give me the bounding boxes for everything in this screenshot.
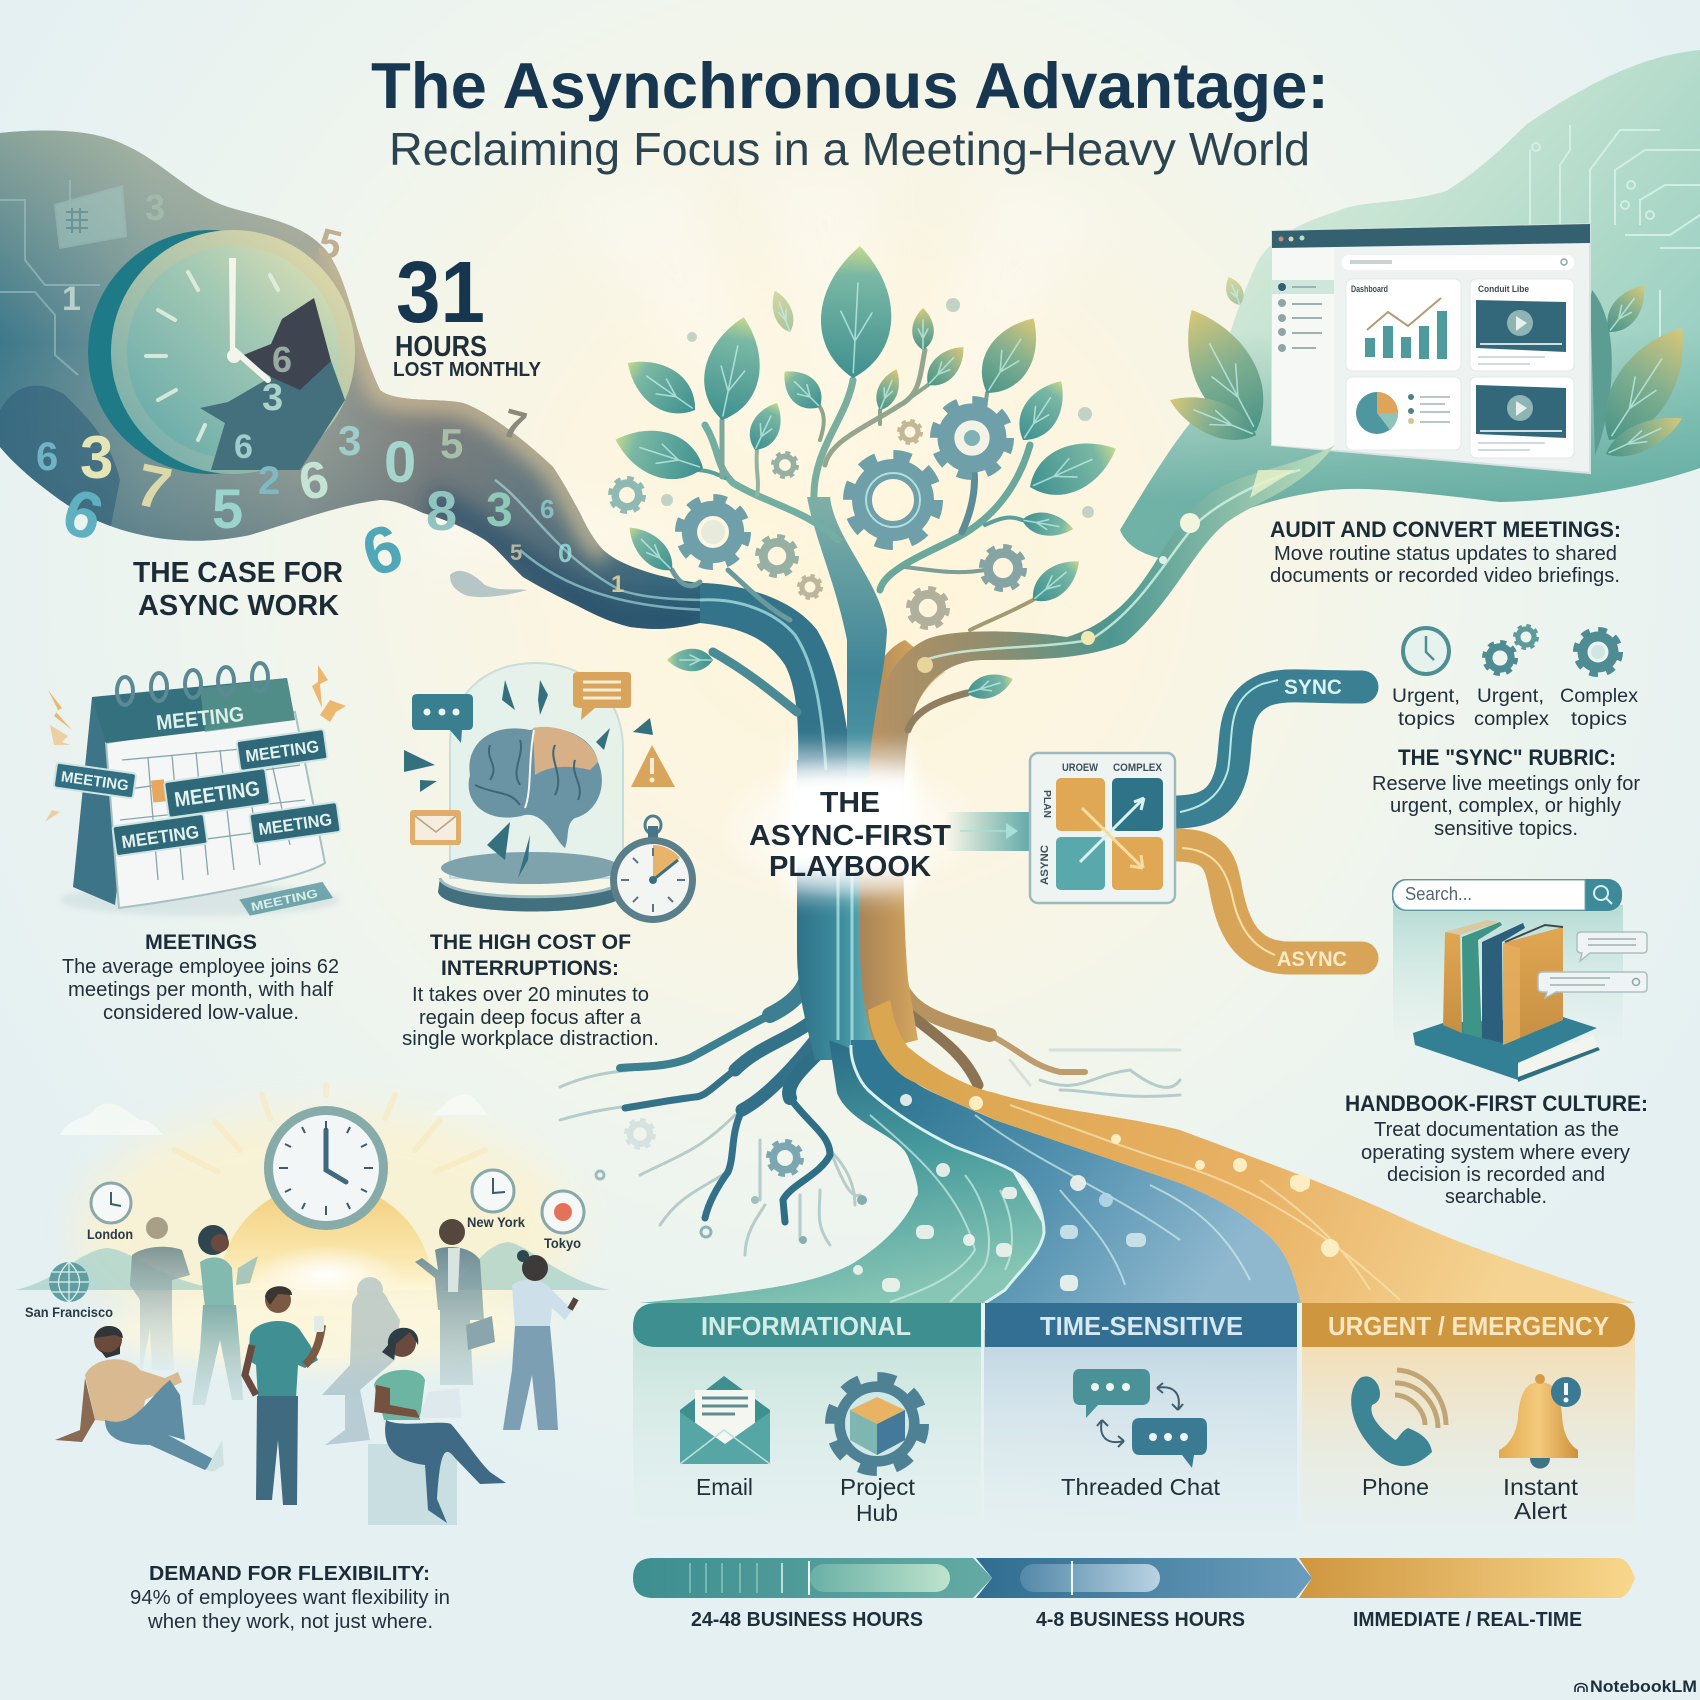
streams [639,1000,1635,1303]
column backgrounds [633,1330,1635,1560]
tree leaves [609,244,1125,704]
heading: the async-first playbook: ASYNC-FIRST [749,820,951,852]
small clocks and city labels: Tokyo [544,1236,581,1251]
timeline labels: IMMEDIATE / REAL-TIME [1353,1609,1582,1631]
text: meetings [62,931,339,1024]
person: ghost sitting [322,1277,400,1445]
sync path: SYNC [1284,676,1342,699]
labels: urgent and complex: complex [1474,708,1549,730]
small clocks and city labels: New York [467,1215,525,1230]
timeline labels: 4-8 BUSINESS HOURS [1036,1609,1245,1631]
person: woman with laptop on block [368,1328,506,1525]
text: the sync rubric [1372,745,1640,840]
header: time-sensitive: TIME-SENSITIVE [1040,1311,1243,1341]
panel: the case for async work [0,131,720,629]
meeting tags: MEETING [60,768,130,795]
tool labels: Email [696,1474,753,1500]
plants around dashboard [1163,274,1700,466]
falling numbers: 2 [258,459,280,503]
falling numbers: 1 [62,280,81,318]
meeting tags: MEETING [244,737,320,766]
tool labels: Threaded Chat [1061,1474,1221,1500]
text: the high cost of interruptions: single workplace distraction. [402,1028,659,1050]
person: standing back left [130,1217,190,1370]
person: phone woman [503,1250,579,1430]
stat: 31 hours lost monthly: 31 [396,244,485,341]
panel: handbook-first culture [1345,879,1648,1208]
icon: phone [1351,1370,1446,1466]
text: handbook-first culture: Treat documentation as the [1374,1119,1619,1141]
text: handbook-first culture [1345,1091,1648,1208]
text: demand for flexibility: DEMAND FOR FLEXIBILITY: [149,1562,430,1585]
text: handbook-first culture: searchable. [1445,1186,1547,1208]
text: the high cost of interruptions: It takes over 20 minutes to [412,984,649,1006]
icon: complex gear [1576,630,1620,674]
text: the high cost of interruptions: regain deep focus after a [419,1007,642,1029]
tree gears [611,298,1094,627]
labels: urgent and complex: Urgent, [1477,685,1544,707]
falling numbers: 6 [36,435,58,479]
text: audit and convert meetings: documents or recorded video briefings. [1270,564,1620,587]
upper stems [672,350,1033,730]
text: the high cost of interruptions: INTERRUPTIONS: [441,956,619,980]
icon: envelope [410,810,461,845]
falling numbers: 3 [145,187,165,228]
labels: urgent and complex [1392,685,1638,730]
labels: urgent and complex: Complex [1560,685,1638,707]
text: audit and convert meetings: Move routine status updates to shared [1274,542,1617,565]
falling numbers: 6 [272,339,292,380]
falling numbers: 0 [558,538,572,568]
panel: response tiers [633,1303,1635,1631]
tool labels: Hub [856,1500,898,1526]
text: the sync rubric: sensitive topics. [1434,818,1578,840]
icon: clock [1403,628,1449,674]
text: the high cost of interruptions: THE HIGH COST OF [430,930,631,954]
falling numbers: 5 [314,220,346,268]
text: handbook-first culture: HANDBOOK-FIRST CULTURE: [1345,1091,1648,1116]
left main branch [700,583,855,790]
icon: email [680,1376,770,1464]
text: meetings: MEETINGS [145,931,257,954]
heading: the case for async work [133,557,343,622]
dashboard window [1272,224,1590,473]
search bar [1392,879,1622,911]
center wash over trunk [715,735,985,910]
mountains [15,1242,610,1290]
dashboard window: Conduit Libe [1478,284,1529,294]
meeting tags [54,729,341,917]
falling numbers: 3 [486,484,513,537]
text: handbook-first culture: operating system where every [1361,1142,1630,1164]
icon: warning [631,745,675,787]
circuit traces [1530,125,1700,380]
falling numbers [36,187,624,598]
timeline labels: 24-48 BUSINESS HOURS [691,1609,923,1631]
person: centre standing with phone [245,1286,324,1505]
arrow into matrix [945,812,1030,851]
panel: demand for flexibility [15,1085,610,1633]
falling numbers: 0 [384,430,416,495]
heading: the async-first playbook: PLAYBOOK [769,851,931,883]
header: urgent emergency: URGENT / EMERGENCY [1328,1311,1609,1341]
async path: ASYNC [1277,948,1347,971]
panel: audit and convert [1120,50,1700,587]
falling numbers: 7 [498,401,531,449]
teal backdrop [1393,905,1623,1040]
person: seated man [55,1326,224,1472]
header: informational [633,1303,981,1347]
tool labels: Phone [1362,1474,1429,1500]
green blob [1120,50,1700,560]
icon: project hub [832,1379,922,1469]
heading: the async-first playbook [749,787,951,883]
title: The Asynchronous Advantage: [371,49,1329,122]
search bar: Search... [1405,884,1472,904]
meeting tags: MEETING [173,777,261,812]
labels: urgent and complex: topics [1571,708,1627,730]
chat bubbles [1538,932,1647,998]
clouds [60,1094,490,1135]
trunk [797,640,945,1060]
books [1413,920,1600,1082]
small clocks and city labels: San Francisco [25,1305,113,1320]
text: the sync rubric: urgent, complex, or highly [1390,795,1621,817]
stat: 31 hours lost monthly [393,244,542,381]
tool labels [696,1474,1579,1526]
upper stem [807,497,887,790]
text: audit and convert meetings: AUDIT AND CONVERT MEETINGS: [1270,517,1621,542]
labels: urgent and complex: topics [1398,708,1455,730]
falling numbers: 6 [540,494,554,524]
icon: brain [469,727,602,848]
heading: the case for async work: THE CASE FOR [133,557,343,589]
heading: the async-first playbook: THE [820,787,880,819]
text: audit and convert meetings [1270,517,1621,587]
header: time-sensitive [985,1303,1297,1347]
text: demand for flexibility: 94% of employees want flexibility in [130,1587,450,1609]
matrix card: COMPLEX [1113,762,1163,774]
falling numbers: 6 [353,509,411,591]
gear in roots [769,1142,801,1174]
falling numbers: 3 [262,377,283,419]
person: tablet [192,1225,258,1405]
stat: 31 hours lost monthly: LOST MONTHLY [393,359,542,381]
small clocks and city labels [25,1170,584,1320]
meeting tags: MEETING [257,810,333,839]
icon: two gears [1485,626,1537,673]
panel: sync rubric [945,626,1640,971]
people [55,1217,579,1525]
sun and rays [76,1085,576,1368]
async path [1175,845,1362,971]
falling numbers: 6 [54,473,112,555]
dark time blob [0,131,720,629]
icon: threaded chat [1073,1369,1207,1468]
title: Reclaiming Focus in a Meeting-Heavy World [389,123,1310,175]
icon: bell [1499,1374,1581,1468]
shards [404,680,653,878]
meeting tags: MEETING [250,886,319,914]
falling numbers: 6 [295,450,333,512]
text: meetings: considered low-value. [103,1002,299,1024]
falling numbers: 5 [440,420,463,467]
falling numbers: 7 [131,451,177,523]
falling numbers: 3 [338,417,361,464]
text: meetings: meetings per month, with half [68,979,333,1001]
text: the high cost of interruptions [402,930,659,1050]
falling numbers: 8 [426,479,457,542]
main clock [264,1106,388,1230]
stat: 31 hours lost monthly: HOURS [395,331,487,363]
text: meetings: The average employee joins 62 [62,956,339,978]
tool labels: Instant [1503,1474,1579,1500]
header: informational: INFORMATIONAL [701,1311,911,1341]
tool labels: Alert [1514,1498,1568,1524]
panel: high cost of interruptions [402,663,696,1050]
meeting tags: MEETING [120,822,200,852]
matrix card [1030,753,1175,903]
calendar illustration: MEETING [155,703,245,735]
falling numbers: 3 [80,424,113,491]
timeline bar [633,1558,1635,1598]
dashboard window: Dashboard [1351,284,1388,294]
chat bubble teal [412,694,473,743]
falling numbers: 6 [234,428,253,466]
sync path [1175,676,1362,812]
right main branch [866,445,1335,790]
panel: meetings [45,663,346,1024]
header: urgent emergency [1302,1303,1635,1347]
text: handbook-first culture: decision is recorded and [1387,1164,1605,1186]
notebooklm mark: NotebookLM [1590,1677,1697,1696]
matrix card: UROEW [1062,762,1099,774]
matrix card: ASYNC [1039,845,1051,885]
falling numbers: 5 [212,477,243,540]
tool labels: Project [840,1474,916,1500]
text: the sync rubric: Reserve live meetings only for [1372,773,1640,795]
timeline labels [691,1609,1582,1631]
tree roots [560,950,1180,1255]
calendar illustration [45,663,346,916]
person: suit [415,1219,495,1385]
glass dome [438,663,627,912]
falling numbers: 5 [510,540,522,565]
icon: stopwatch [610,816,696,923]
text: demand for flexibility [130,1562,450,1633]
heading: the case for async work: ASYNC WORK [138,590,339,622]
text: the sync rubric: THE "SYNC" RUBRIC: [1398,745,1616,770]
matrix card: PLAN [1041,790,1052,818]
circuit lines and calendar [0,180,126,375]
falling numbers: 1 [611,571,624,598]
text: demand for flexibility: when they work, not just where. [147,1611,433,1633]
clock broken [88,230,355,474]
labels: urgent and complex: Urgent, [1392,685,1460,707]
small clocks and city labels: London [87,1227,133,1242]
chat bubble orange [573,672,631,720]
title [371,49,1329,175]
tree: async-first playbook [560,244,1635,1303]
